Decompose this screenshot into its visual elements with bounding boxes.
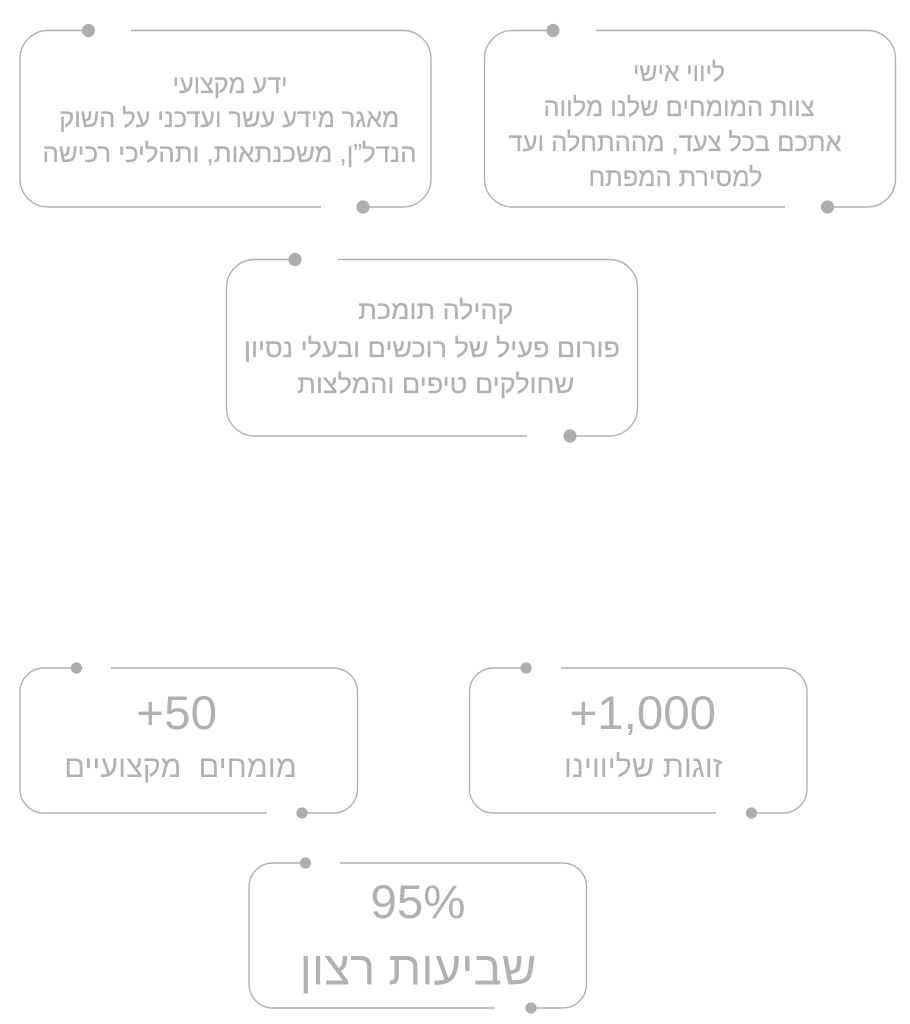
text: personal guidance: אתכם בכל צעד, מההתחלה ועד [508,127,842,157]
text: supportive community: פורום פעיל של רוכשים ובעלי נסיון [244,333,620,363]
stat: 50+: +50 [136,687,217,740]
text: professional knowledge: הנדל”ן, משכנתאות, ותהליכי רכישה [42,138,416,168]
panel: professional knowledge [20,24,431,214]
stat: 1,000+: +1,000 [569,687,716,740]
label: satisfaction: שביעות רצון [300,942,536,996]
text: supportive community: קהילה תומכת [358,295,513,325]
stat: 95%: 95% [370,876,466,929]
text: personal guidance [508,57,842,192]
text: professional knowledge: ידע מקצועי [172,69,288,99]
panel: personal guidance [484,24,896,214]
text: professional knowledge [42,69,416,168]
panel: stat experts [20,662,358,819]
panel: stat satisfaction [249,857,586,1014]
text: personal guidance: ליווי אישי [633,57,725,87]
text: supportive community: שחולקים טיפים והמלצות [297,369,574,399]
panel: supportive community [226,253,638,443]
text: personal guidance: למסירת המפתח [588,162,762,192]
label: couples: זוגות שליווינו [564,750,723,784]
text: supportive community [244,295,620,399]
panel: stat couples [470,662,807,819]
text: personal guidance: צוות המומחים שלנו מלווה [544,92,814,122]
label: experts: מומחים מקצועיים [64,750,297,784]
text: professional knowledge: מאגר מידע עשר ועדכני על השוק [59,103,399,133]
